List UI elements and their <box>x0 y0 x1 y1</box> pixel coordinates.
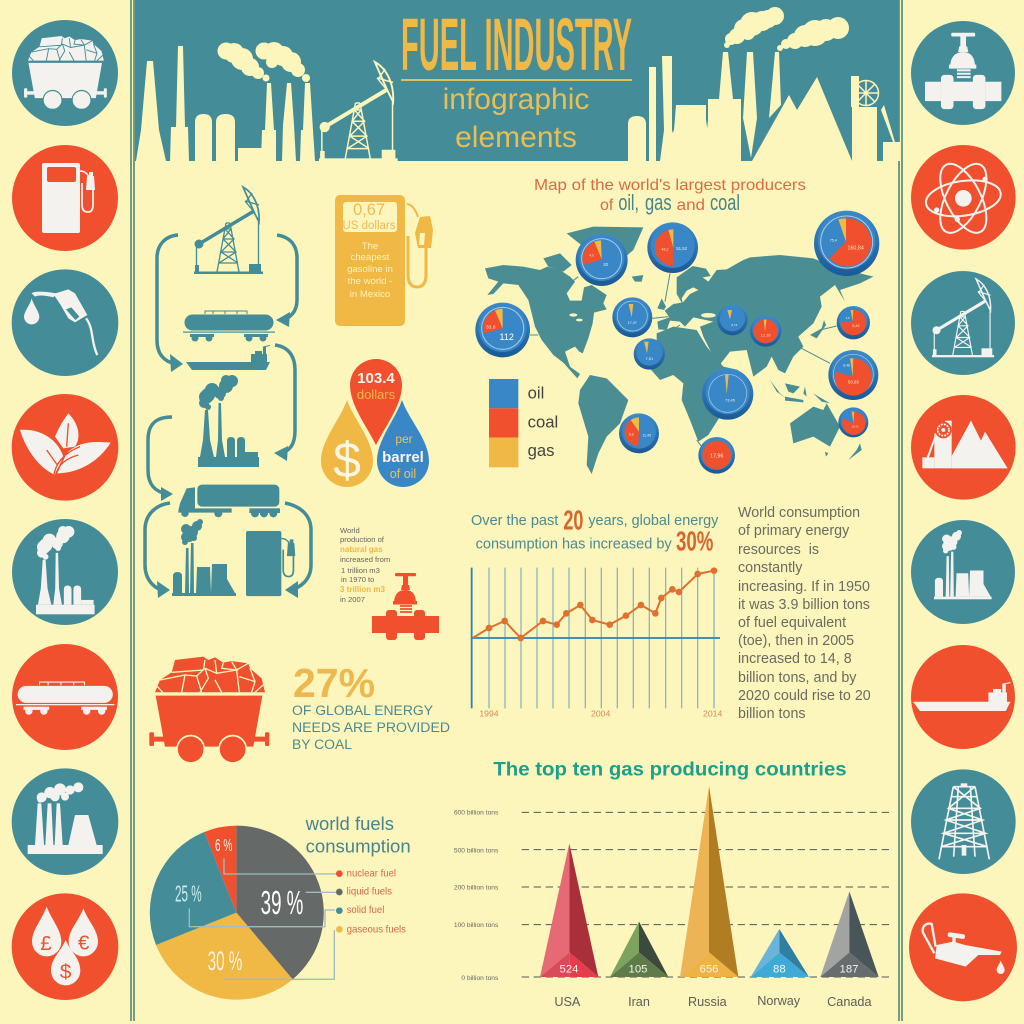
world consumption text block: billion tons, and by <box>738 670 857 686</box>
map heading: coal <box>710 190 740 215</box>
icon: coal cart badge <box>12 20 118 126</box>
bubble connectors <box>530 273 838 447</box>
right industry silhouette <box>628 7 900 161</box>
pyramid: Russia <box>680 786 738 977</box>
icon: filling station <box>246 531 295 596</box>
bubble: South America: 11,45 <box>642 434 651 438</box>
pyramid: Canada: 187 <box>840 964 858 976</box>
icon: valve badge <box>911 21 1015 125</box>
natural gas production note <box>340 526 390 604</box>
price caption: gasoline in <box>347 264 393 275</box>
country labels: Russia <box>688 995 728 1009</box>
energy consumption line chart <box>471 505 722 719</box>
gas chart axis labels: 600 billion tons <box>454 810 499 817</box>
icon: leaves badge <box>12 394 118 501</box>
icon: refinery badge <box>12 519 118 625</box>
icon: currency drops badge: € <box>78 931 90 954</box>
legend: oil <box>528 383 544 402</box>
bubble: Russia <box>814 211 879 276</box>
coal caption <box>292 703 450 752</box>
bubble: Russia: 160,84 <box>848 246 864 252</box>
icon: mine and mountains badge <box>911 395 1016 500</box>
bubble: Western Europe <box>612 297 652 337</box>
bubble: Canada: 20 <box>603 262 609 267</box>
chart year labels: 1994 <box>479 709 499 719</box>
pyramid: USA <box>540 843 598 977</box>
price text: US dollars <box>342 220 396 232</box>
bubble: Europe north <box>647 222 698 273</box>
country labels <box>554 994 872 1009</box>
pie legend: solid fuel <box>347 905 384 916</box>
natural gas production note: 3 trillion m3 <box>340 585 385 594</box>
country labels: Norway <box>757 994 801 1008</box>
world consumption text block: it was 3.9 billion tons <box>738 597 870 613</box>
bubble: China: 58,69 <box>848 379 859 384</box>
bubble: South Africa: 17,96 <box>710 454 723 460</box>
bubble: USA: 112 <box>500 332 514 342</box>
bubble: Japan <box>837 306 870 339</box>
icon: tanker ship <box>186 346 270 370</box>
country labels: Canada <box>827 995 872 1009</box>
icon: nozzle and drop badge <box>12 269 118 376</box>
pie percentages: 30 % <box>208 946 242 976</box>
chart year labels: 2004 <box>591 709 610 719</box>
process flow: oil production cycle <box>145 187 311 598</box>
chart axes <box>472 568 720 708</box>
chart heading: 20 <box>563 505 583 536</box>
subtitle <box>443 83 589 154</box>
red drop <box>350 359 402 445</box>
bubble: Europe north: 46,2 <box>661 248 669 252</box>
bubble: USA <box>475 303 530 357</box>
pyramid: Russia: 656 <box>700 964 718 976</box>
icon: rail tank wagon <box>183 311 275 342</box>
icon: currency drops badge: $ <box>60 960 72 983</box>
bubble: China: 6,48 <box>843 364 850 368</box>
left industry silhouette <box>136 42 398 161</box>
27 percent figure: 27% <box>293 660 375 706</box>
yellow drop <box>321 400 373 487</box>
drop labels: per <box>395 432 413 446</box>
bubble: Canada <box>576 234 628 286</box>
bubble: Japan: 3,8 <box>846 316 850 320</box>
bubble: Japan: 6,42 <box>852 324 860 328</box>
world consumption text block: billion tons <box>738 706 806 722</box>
bubble: China <box>828 350 878 400</box>
world map panel <box>475 177 879 474</box>
drop labels: barrel <box>382 449 424 466</box>
price caption: in Mexico <box>350 289 390 300</box>
bubble: South Africa <box>698 437 735 474</box>
drop labels: of oil <box>390 467 416 481</box>
coal caption: OF GLOBAL ENERGY <box>292 703 433 718</box>
gas chart axis labels: 500 billion tons <box>454 847 499 854</box>
bubble: North Africa <box>634 338 665 370</box>
bubble: Middle Asia: 8,74 <box>731 323 738 327</box>
price text: 0,67 <box>353 201 385 219</box>
natural gas production note: in 1970 to <box>341 575 374 584</box>
chart heading <box>471 505 719 556</box>
map heading <box>534 177 806 215</box>
map heading: gas <box>645 190 672 215</box>
pie percentages: 6 % <box>215 835 232 855</box>
subtitle: elements <box>455 121 577 154</box>
natural gas production note: 1 trillion m3 <box>341 566 380 575</box>
pyramid: Norway <box>751 929 809 977</box>
pyramid: Norway: 88 <box>773 964 786 976</box>
map heading: Map of the world's largest producers <box>534 177 806 194</box>
world consumption text block: (toe), then in 2005 <box>738 633 854 649</box>
price caption <box>347 241 393 300</box>
legend <box>489 379 558 467</box>
icon: oil derrick badge <box>911 769 1016 874</box>
drop labels <box>333 370 424 488</box>
country labels: USA <box>554 995 581 1009</box>
chart year labels: 2014 <box>703 709 722 719</box>
world consumption text block: constantly <box>738 560 803 576</box>
icon: pumpjack badge <box>911 271 1015 375</box>
coal caption: BY COAL <box>292 737 353 752</box>
gas chart heading: The top ten gas producing countries <box>493 760 847 781</box>
world consumption text block: World consumption <box>738 505 860 521</box>
right frame lines <box>898 0 903 1021</box>
pump body <box>335 195 405 326</box>
drop labels: $ <box>333 432 361 488</box>
pie legend: nuclear fuel <box>347 868 396 879</box>
world consumption text block: increased to 14, 8 <box>738 651 852 667</box>
header banner <box>135 0 900 161</box>
gas chart axis labels: 100 billion tons <box>454 922 499 929</box>
gas chart axis labels: 200 billion tons <box>454 885 499 892</box>
world consumption text block: of fuel equivalent <box>738 615 846 631</box>
drop labels: 103.4 <box>357 370 395 387</box>
natural gas production note: World <box>340 526 360 535</box>
gas chart gridlines <box>522 812 890 977</box>
pyramid: Canada <box>820 891 879 977</box>
bubble: North Africa: 7,51 <box>645 356 654 361</box>
drop labels: dollars <box>357 387 396 402</box>
price caption: The <box>362 241 378 252</box>
price caption: cheapest <box>351 252 390 263</box>
natural gas production note: increased from <box>340 555 390 564</box>
icon: currency drops badge <box>12 893 118 1000</box>
header banner: FUEL INDUSTRY <box>401 3 632 86</box>
icon: currency drops badge: £ <box>40 932 52 955</box>
gasoline price callout <box>335 195 433 326</box>
bubble: Australia <box>838 407 868 437</box>
icon: atom badge <box>911 145 1016 250</box>
bubble: Middle East: 73,45 <box>725 398 736 403</box>
pyramid: USA: 524 <box>560 964 578 976</box>
title rule <box>401 79 632 81</box>
right icon column <box>909 21 1017 1001</box>
map heading: oil, <box>618 190 639 215</box>
bubble: USA: 33,8 <box>486 324 496 330</box>
pie callout lines <box>189 858 337 979</box>
natural gas production note: in 2007 <box>340 595 365 604</box>
price text <box>342 201 396 232</box>
icon: coal cart <box>149 657 269 763</box>
chart grid <box>489 568 714 708</box>
pie heading: world fuels <box>305 813 394 834</box>
country labels: Iran <box>628 995 650 1009</box>
chart heading: years, global energy <box>588 513 719 529</box>
chart heading: 30% <box>676 525 713 556</box>
bubble: India <box>750 315 781 347</box>
chart data line <box>473 567 717 641</box>
pie slices <box>150 826 324 1000</box>
icon: fuel pump badge <box>12 145 118 251</box>
pie percentages: 39 % <box>261 885 303 922</box>
icon: tanker ship badge <box>911 645 1015 749</box>
natural gas production note: production of <box>340 535 385 544</box>
map heading: and <box>677 197 705 214</box>
hose and nozzle <box>407 204 433 287</box>
bubble: Europe north: 51,52 <box>676 246 688 251</box>
bubble: Australia: 16,72 <box>852 424 859 428</box>
icon: oil can badge <box>909 893 1017 1001</box>
pie legend <box>336 868 406 935</box>
icon: fuel truck <box>178 485 280 517</box>
legend: gas <box>528 441 555 460</box>
coal caption: NEEDS ARE PROVIDED <box>292 720 450 735</box>
world consumption text block: increasing. If in 1950 <box>738 579 870 595</box>
legend: coal <box>528 412 558 431</box>
chart year labels <box>479 709 722 719</box>
bubble: South America: 5,8 <box>629 433 634 437</box>
bubble: South America <box>619 413 659 453</box>
price per barrel drops <box>321 359 429 488</box>
world consumption text block: resources is <box>738 542 819 558</box>
bubble: Russia: 75,4 <box>830 239 837 243</box>
bubble: Middle East <box>702 368 753 420</box>
icon: pumpjack <box>194 187 263 274</box>
pie legend: liquid fuels <box>347 887 392 898</box>
price caption: the world - <box>348 276 392 287</box>
bubble: Canada: 4,0 <box>589 254 594 258</box>
pie legend: gaseous fuels <box>347 924 406 935</box>
left frame lines <box>130 0 135 1021</box>
blue drop <box>377 400 429 487</box>
bubble: India: 12,28 <box>761 333 771 338</box>
chart heading: Over the past <box>471 513 558 529</box>
world consumption text block: 2020 could rise to 20 <box>738 688 871 704</box>
left icon column <box>12 20 118 1000</box>
pie percentages: 25 % <box>175 881 202 907</box>
arrows between stages <box>145 235 311 598</box>
natural gas production note: natural gas <box>340 545 383 554</box>
gas chart axis labels <box>454 810 499 982</box>
chart heading: consumption has increased by <box>476 536 672 552</box>
map heading: of <box>600 197 614 214</box>
world consumption text block <box>738 505 871 722</box>
subtitle: infographic <box>443 83 589 116</box>
pyramid: Iran <box>610 922 668 977</box>
icon: red valve <box>372 573 439 640</box>
bubble: Middle Asia <box>717 305 748 335</box>
icon: factory with cooling tower badge <box>12 768 118 875</box>
pie percentages <box>175 835 303 976</box>
icon: power plant <box>172 519 236 596</box>
icon: power plant badge <box>911 520 1015 624</box>
pie heading: consumption <box>306 835 411 856</box>
continents <box>485 227 873 474</box>
icon: refinery <box>198 375 259 467</box>
price window <box>343 202 397 232</box>
world fuels pie chart <box>150 813 411 1000</box>
icon: tank wagon badge <box>12 644 118 750</box>
gas chart axis labels: 0 billion tons <box>461 975 499 982</box>
gas producers chart <box>454 760 890 1009</box>
pyramid: Iran: 105 <box>629 964 647 976</box>
world consumption text block: of primary energy <box>738 523 850 539</box>
bubble: Western Europe: 17,07 <box>628 321 637 325</box>
coal statistic <box>149 657 450 763</box>
pie heading <box>305 813 411 856</box>
